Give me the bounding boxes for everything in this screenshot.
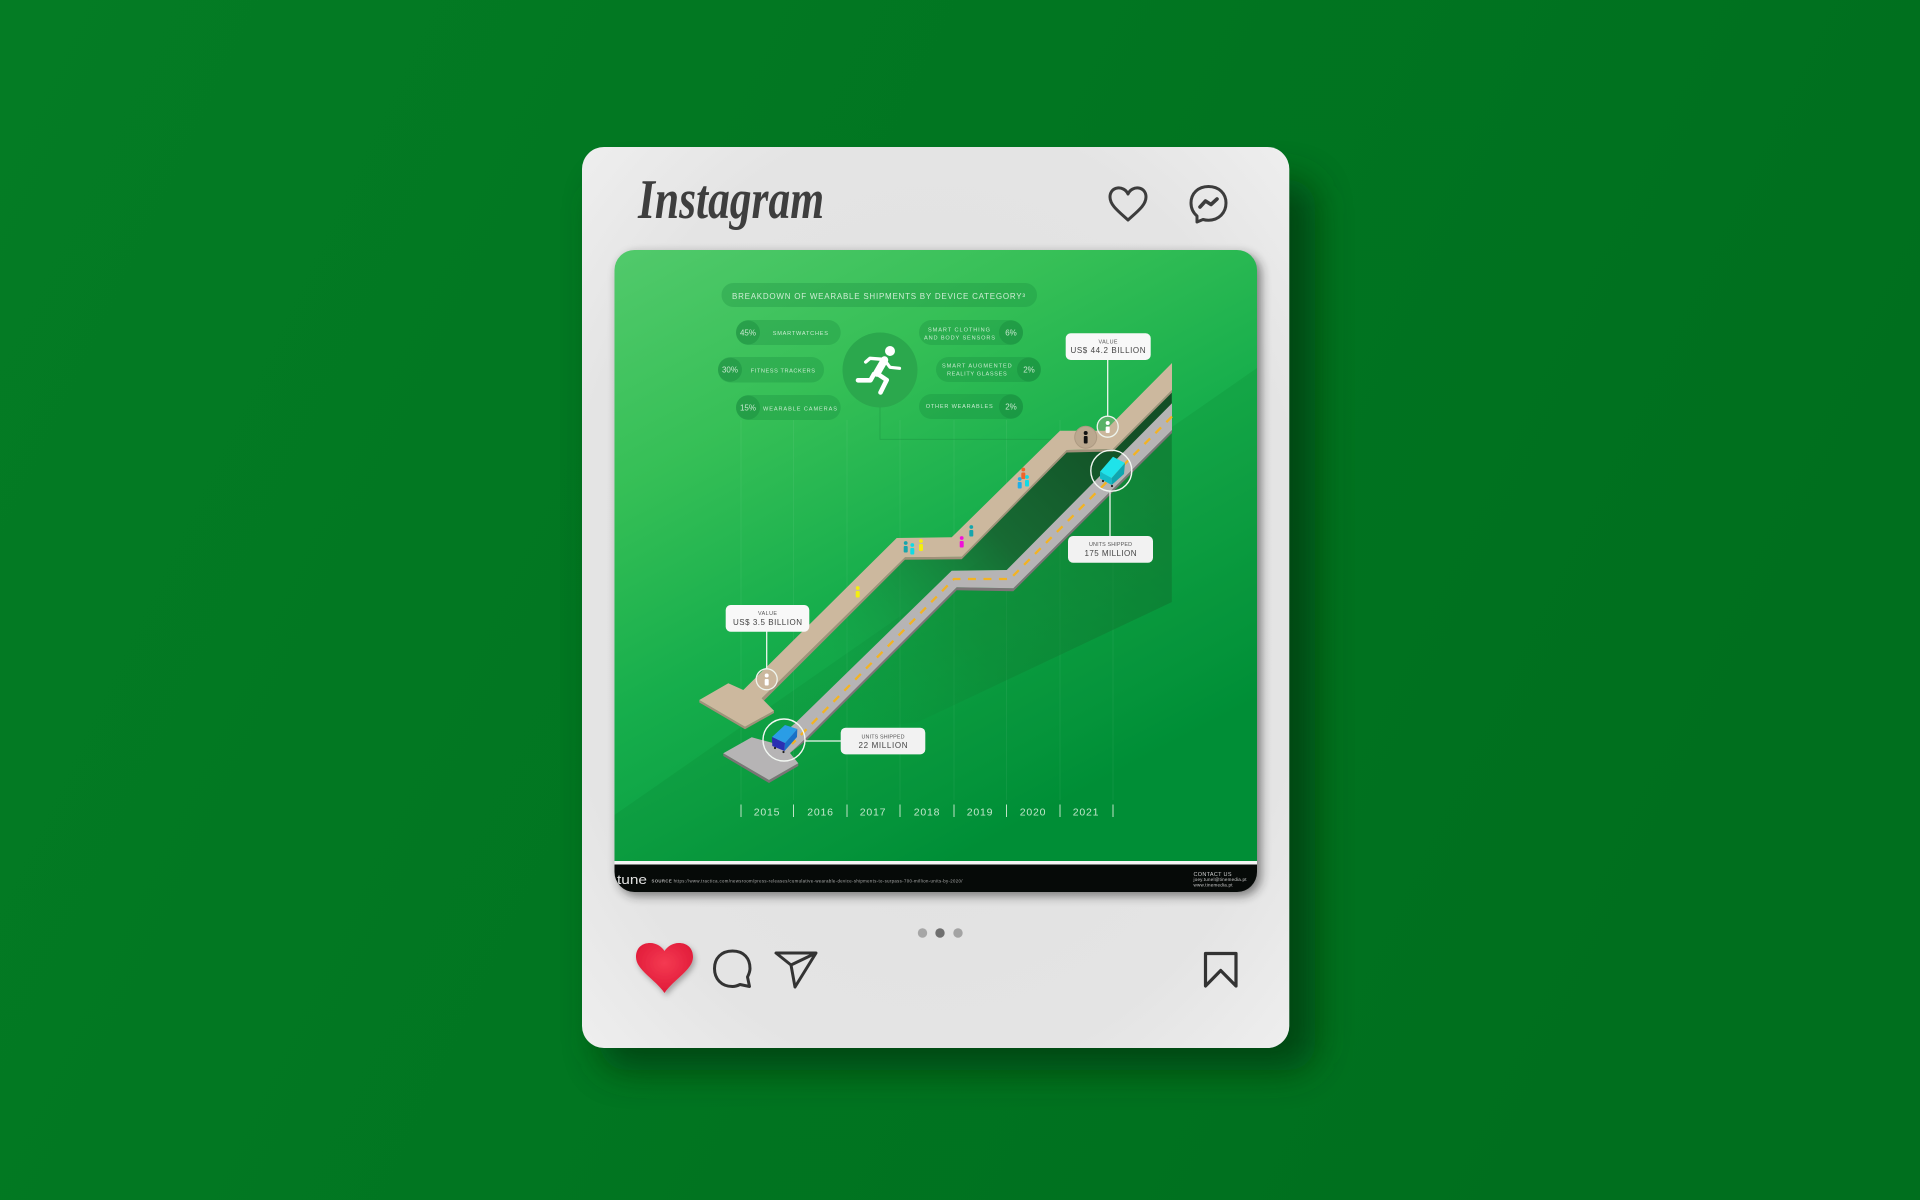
- icon: blue truck 2015: [763, 719, 805, 761]
- grey road surface: [723, 403, 1172, 780]
- heading pill: BREAKDOWN OF WEARABLE SHIPMENTS BY DEVICE CATEGORY³: [732, 292, 1025, 301]
- icon: send arrow: [776, 953, 816, 987]
- year labels: 2020: [1020, 806, 1046, 818]
- icon: yellow person: [856, 586, 860, 598]
- footer contact: joey.tunel@tinemedia.pt: [1192, 877, 1247, 882]
- icon: blue person: [1018, 477, 1022, 488]
- stat: smart clothing: AND BODY SENSORS: [924, 335, 995, 341]
- tan road surface: [699, 363, 1172, 727]
- shadow under shipment road: [914, 433, 1172, 692]
- year labels: 2021: [1073, 806, 1099, 818]
- icon: teal person 2: [969, 525, 973, 536]
- footer contact: CONTACT US: [1194, 872, 1232, 878]
- instagram post mockup scene: [570, 0, 1920, 1200]
- stat: smartwatches: 45%: [740, 328, 756, 338]
- stat: smartwatches: [736, 320, 841, 345]
- icon: teal person: [904, 541, 908, 552]
- stat: wearable cameras: 15%: [740, 404, 756, 412]
- stat: other wearables: [919, 394, 1023, 419]
- icon: checkpoint person: [1084, 431, 1088, 444]
- stat: other wearables: OTHER WEARABLES: [926, 404, 993, 410]
- stat: other wearables: 2%: [1005, 402, 1017, 412]
- road centre line: [792, 416, 1172, 744]
- icon: cyan person 2: [1025, 475, 1029, 486]
- stat: fitness trackers: [718, 357, 824, 382]
- icon: orange person: [1021, 468, 1025, 479]
- callout: value 2015: VALUE: [758, 611, 777, 617]
- icon: runner in circle: [842, 332, 918, 408]
- road pedestrians: [856, 468, 1029, 598]
- footer contact: www.tinemedia.pt: [1194, 882, 1233, 888]
- icon: comment bubble: [714, 951, 750, 986]
- connector from runner to value road: [880, 408, 1052, 440]
- stat: smart clothing: SMART CLOTHING: [928, 327, 990, 333]
- stat: smart glasses: REALITY GLASSES: [947, 372, 1007, 378]
- callout: value 2021: [1066, 333, 1151, 360]
- stat: wearable cameras: [736, 395, 841, 420]
- axis ticks: [741, 804, 1113, 817]
- carousel dots: [918, 928, 963, 938]
- shadow between roads: [846, 390, 1172, 634]
- callout: units 2021: [1068, 536, 1153, 563]
- stat: smart glasses: 2%: [1023, 366, 1035, 374]
- stat: smart glasses: SMART AUGMENTED: [942, 363, 1012, 369]
- tan road side: [699, 390, 1172, 729]
- footer band: [614, 864, 1257, 892]
- heading pill: [722, 283, 1037, 307]
- year grid lines: [741, 420, 1113, 800]
- callout: value 2021: VALUE: [1098, 340, 1118, 346]
- callout: units 2021: UNITS SHIPPED: [1089, 542, 1132, 548]
- white divider: [614, 861, 1257, 864]
- stat: smartwatches: SMARTWATCHES: [773, 331, 828, 337]
- stat: wearable cameras: WEARABLE CAMERAS: [763, 406, 837, 412]
- callout: units 2015: [841, 728, 925, 754]
- green infographic field: [614, 250, 1257, 862]
- instagram wordmark: Instagram: [637, 169, 824, 231]
- infographic image: [614, 250, 1257, 892]
- footer contact: [1192, 872, 1247, 888]
- stat: fitness trackers: 30%: [722, 366, 738, 375]
- icon: yellow person 2: [919, 539, 923, 551]
- icon: magenta person: [960, 536, 964, 548]
- stat: smart glasses: [936, 357, 1041, 382]
- card shadow: [600, 180, 1315, 1070]
- year labels: 2019: [967, 806, 993, 818]
- icon: outline heart: [1110, 188, 1146, 220]
- value road (tan): [699, 363, 1172, 729]
- year labels: [754, 806, 1099, 818]
- footer source: SOURCE https://www.tractica.com/newsroom/press-releases/cumulative-wearable-device-shipments-to-surpass-700-million-units-by-2020/: [652, 878, 963, 884]
- callout: value 2021: US$ 44.2 BILLION: [1070, 346, 1146, 355]
- checkpoint disc: [1075, 426, 1097, 448]
- icon: cyan person: [910, 543, 914, 554]
- icon: cyan truck 2021: [1091, 450, 1132, 491]
- year labels: 2018: [914, 806, 940, 818]
- stat: smart clothing: 6%: [1005, 328, 1017, 338]
- diagonal light band: [1172, 368, 1257, 434]
- callout: value 2015: US$ 3.5 BILLION: [733, 618, 802, 627]
- infographic shadow: [618, 254, 1261, 896]
- icon: 2021 value marker: [1097, 416, 1118, 437]
- card body: [582, 147, 1289, 1048]
- icon: bookmark: [1206, 954, 1236, 986]
- icon: red heart: [636, 943, 693, 993]
- year labels: 2015: [754, 806, 780, 818]
- stat: smart clothing: [919, 320, 1023, 345]
- year labels: 2016: [807, 806, 834, 818]
- callout: units 2015: UNITS SHIPPED: [862, 734, 905, 740]
- icon: 2015 value marker: [756, 669, 777, 690]
- footer logo: tune: [617, 872, 647, 887]
- year labels: 2017: [860, 806, 886, 818]
- stat: fitness trackers: FITNESS TRACKERS: [751, 368, 815, 374]
- icon: messenger: [1191, 186, 1226, 222]
- callout leader lines: [767, 360, 1110, 741]
- callout: value 2015: [726, 605, 809, 632]
- callout: units 2021: 175 MILLION: [1084, 549, 1137, 558]
- year axis: [741, 804, 1113, 818]
- post card: [582, 147, 1289, 1048]
- chart: road shadows: [846, 390, 1172, 692]
- callout: units 2015: 22 MILLION: [858, 741, 908, 750]
- grey road side: [723, 430, 1172, 783]
- shipments road (grey): [723, 403, 1172, 783]
